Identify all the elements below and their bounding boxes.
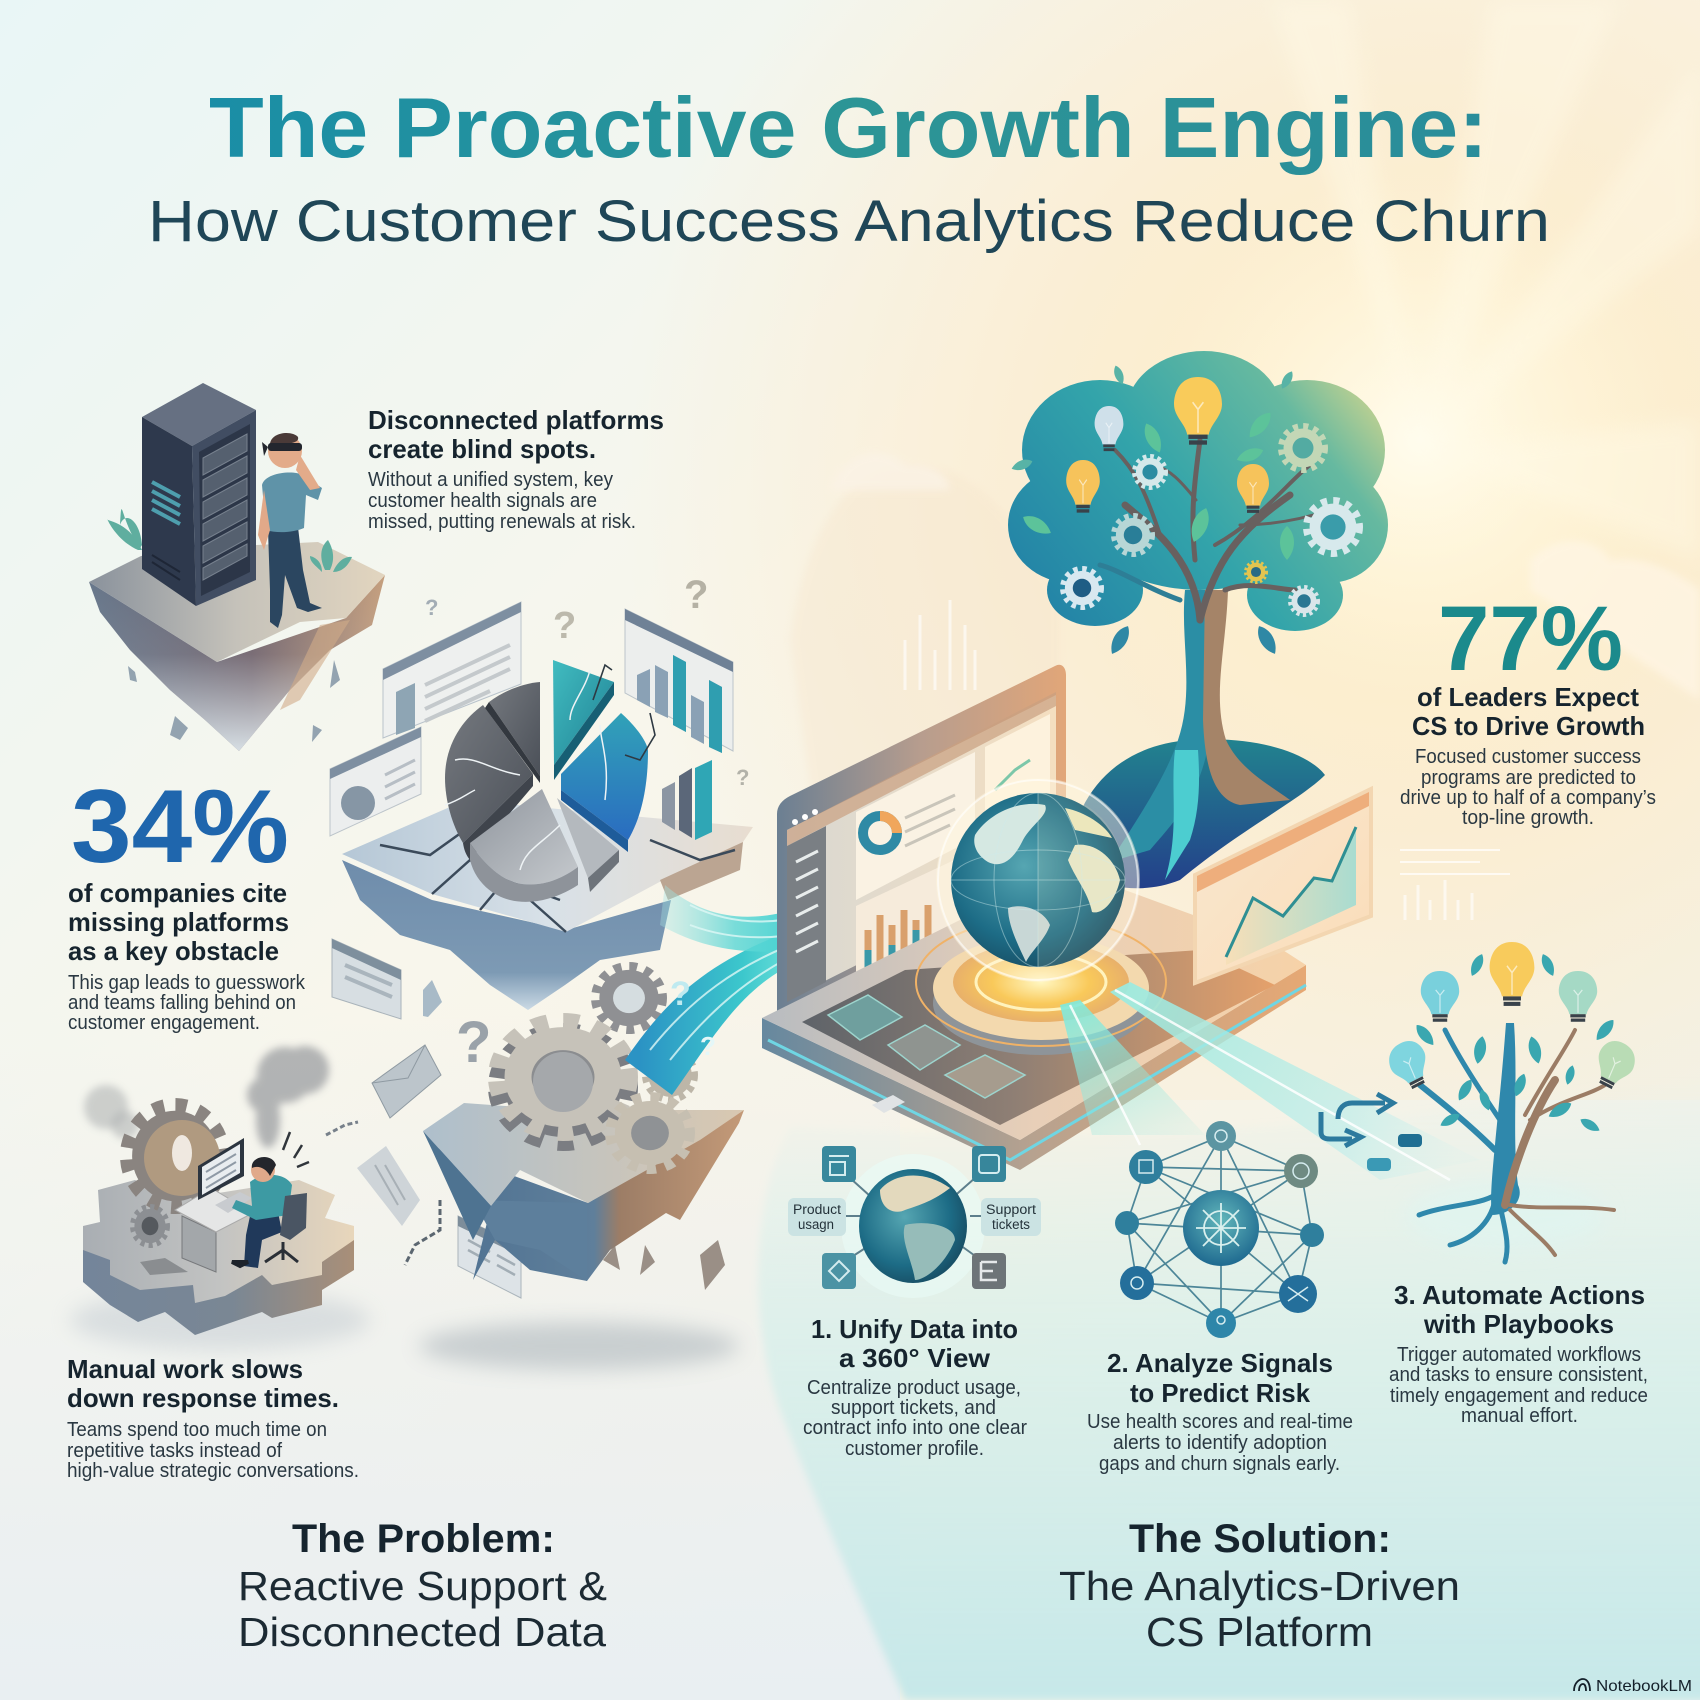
question marks: ?	[425, 595, 438, 620]
worker	[232, 1157, 307, 1268]
step 1 text: 1. Unify Data into	[811, 1314, 1018, 1344]
illustration: laptop analytics platform	[762, 665, 1371, 1170]
step 3 text: manual effort.	[1461, 1405, 1578, 1427]
text block: manual work: Teams spend too much time on	[67, 1419, 327, 1441]
stat: 34%: customer engagement.	[68, 1012, 260, 1034]
stat: 34%: as a key obstacle	[68, 936, 279, 966]
leaves	[1413, 952, 1617, 1134]
island	[423, 1103, 744, 1281]
bulbs	[1490, 942, 1534, 1006]
stat: 77%	[1400, 588, 1656, 829]
illustration: data stream into platform: ?	[700, 1031, 716, 1061]
section heading: the problem: Reactive Support &	[238, 1563, 607, 1609]
illustration: data stream into platform: ?	[670, 975, 691, 1013]
window panels	[330, 602, 733, 836]
step 1 text: customer profile.	[845, 1438, 984, 1460]
keypad cards	[828, 995, 1025, 1098]
canopy	[1008, 351, 1388, 631]
step 2 text	[1087, 1348, 1353, 1475]
leaves	[1010, 364, 1296, 657]
step 1 text: contract info into one clear	[803, 1417, 1027, 1439]
illustration: gears on crumbling island	[326, 939, 744, 1298]
connectors	[845, 1178, 990, 1258]
base	[762, 868, 1306, 1170]
person	[258, 433, 322, 628]
roots	[1419, 1030, 1507, 1262]
title: How Customer Success Analytics Reduce Churn	[148, 189, 1550, 254]
trunk	[1491, 1023, 1520, 1215]
icon boxes	[822, 1146, 1006, 1289]
illustration: person blindfolded beside server on floating island	[89, 383, 385, 751]
illustration: signal network	[1115, 1121, 1324, 1338]
step 2 text: 2. Analyze Signals	[1107, 1348, 1333, 1378]
arrow beams to solution steps	[1060, 982, 1480, 1180]
question marks: ?	[553, 605, 576, 647]
text block: manual work: repetitive tasks instead of	[67, 1440, 282, 1462]
step 1 text: support tickets, and	[831, 1397, 996, 1419]
title: The Proactive Growth Engine:	[209, 81, 1488, 176]
stat: 34%: of companies cite	[68, 878, 287, 908]
bulbs	[1174, 377, 1222, 445]
step 3 text	[1389, 1280, 1648, 1427]
step 2 text: gaps and churn signals early.	[1099, 1453, 1340, 1475]
question marks: ?	[684, 573, 708, 617]
server rack	[142, 383, 256, 606]
trunk and branches	[1100, 440, 1330, 880]
chart panel	[1195, 789, 1371, 983]
text block: manual work: high-value strategic conversations.	[67, 1460, 359, 1482]
gears	[1135, 457, 1165, 487]
broken gears	[128, 1106, 222, 1206]
step 1 text	[803, 1314, 1027, 1460]
text block: disconnected platforms: create blind spots.	[368, 434, 596, 464]
text block: disconnected platforms	[368, 405, 664, 533]
screen	[777, 665, 1066, 1015]
illustration: unify data globe	[788, 1146, 1041, 1298]
question marks: ?	[736, 765, 749, 790]
stat: 34%: and teams falling behind on	[68, 992, 296, 1014]
label: product usage: Product	[793, 1202, 841, 1217]
smoke	[84, 1046, 329, 1148]
illustration: automation arrows	[1321, 1094, 1422, 1171]
illustration: broken pie chart on cracked island	[330, 573, 753, 1010]
stat: 77%: top-line growth.	[1462, 807, 1594, 829]
desk and computer	[175, 1138, 253, 1272]
text block: manual work	[67, 1354, 359, 1482]
mini bar chart	[662, 760, 712, 840]
stat: 34%: missing platforms	[68, 907, 289, 937]
section heading: the problem	[238, 1517, 607, 1655]
debris and papers	[326, 939, 725, 1298]
stat: 77%: 77%	[1438, 588, 1623, 690]
stat: 77%: Focused customer success	[1415, 746, 1641, 768]
step 3 text: with Playbooks	[1423, 1309, 1614, 1339]
shadow under problem illustrations	[419, 1322, 739, 1370]
step 3 text: Trigger automated workflows	[1397, 1344, 1641, 1366]
glowing pedestal	[916, 918, 1166, 1055]
step 2 text: to Predict Risk	[1130, 1378, 1311, 1408]
label: support tickets	[981, 1198, 1041, 1236]
stat: 77%: programs are predicted to	[1421, 767, 1636, 789]
section heading: the problem: The Problem:	[292, 1517, 555, 1561]
section heading: the solution: The Solution:	[1129, 1517, 1391, 1561]
step 1 text: a 360° View	[839, 1343, 991, 1373]
stat: 77%: drive up to half of a company’s	[1400, 787, 1656, 809]
label: support tickets: tickets	[992, 1217, 1030, 1232]
stat: 34%: This gap leads to guesswork	[68, 972, 306, 994]
text block: disconnected platforms: Disconnected platforms	[368, 405, 664, 435]
step 2 text: Use health scores and real-time	[1087, 1411, 1353, 1433]
label: product usage	[788, 1198, 846, 1236]
label: product usage: usagn	[798, 1217, 834, 1232]
title	[148, 81, 1550, 254]
stat: 77%: of Leaders Expect	[1417, 682, 1639, 712]
illustration: data stream into platform	[625, 885, 808, 1095]
stat: 34%	[68, 769, 306, 1034]
stat: 77%: CS to Drive Growth	[1412, 711, 1645, 741]
cracked island	[342, 800, 753, 1010]
small globe	[859, 1169, 967, 1283]
illustration: small tree with bulbs	[1384, 942, 1640, 1262]
illustration: growth tree	[1008, 351, 1388, 888]
text block: disconnected platforms: customer health signals are	[368, 490, 597, 512]
gears	[596, 967, 662, 1029]
section heading: the solution: The Analytics-Driven	[1059, 1563, 1460, 1609]
plants	[107, 509, 352, 572]
globe	[936, 778, 1140, 982]
label: support tickets: Support	[986, 1202, 1036, 1217]
question marks	[425, 573, 749, 790]
section heading: the problem: Disconnected Data	[238, 1609, 606, 1655]
platform gear	[83, 1180, 354, 1335]
watermark: NotebookLM: NotebookLM	[1596, 1678, 1692, 1695]
step 3 text: 3. Automate Actions	[1394, 1280, 1645, 1310]
text block: manual work: Manual work slows	[67, 1354, 303, 1384]
mound with roots	[1068, 739, 1325, 888]
text block: manual work: down response times.	[67, 1383, 339, 1413]
pie slices	[445, 660, 648, 902]
island rock	[89, 542, 385, 751]
step 3 text: timely engagement and reduce	[1390, 1385, 1648, 1407]
stat: 34%: 34%	[71, 769, 289, 885]
text block: disconnected platforms: Without a unified system, key	[368, 469, 613, 491]
section heading: the solution	[1059, 1517, 1460, 1655]
step 3 text: and tasks to ensure consistent,	[1389, 1364, 1648, 1386]
section heading: the solution: CS Platform	[1146, 1609, 1373, 1655]
debris and papers: ?	[456, 1010, 491, 1075]
step 2 text: alerts to identify adoption	[1113, 1432, 1327, 1454]
illustration: man at desk on gear platform	[70, 1046, 370, 1350]
text block: disconnected platforms: missed, putting renewals at risk.	[368, 511, 636, 533]
step 1 text: Centralize product usage,	[807, 1377, 1021, 1399]
